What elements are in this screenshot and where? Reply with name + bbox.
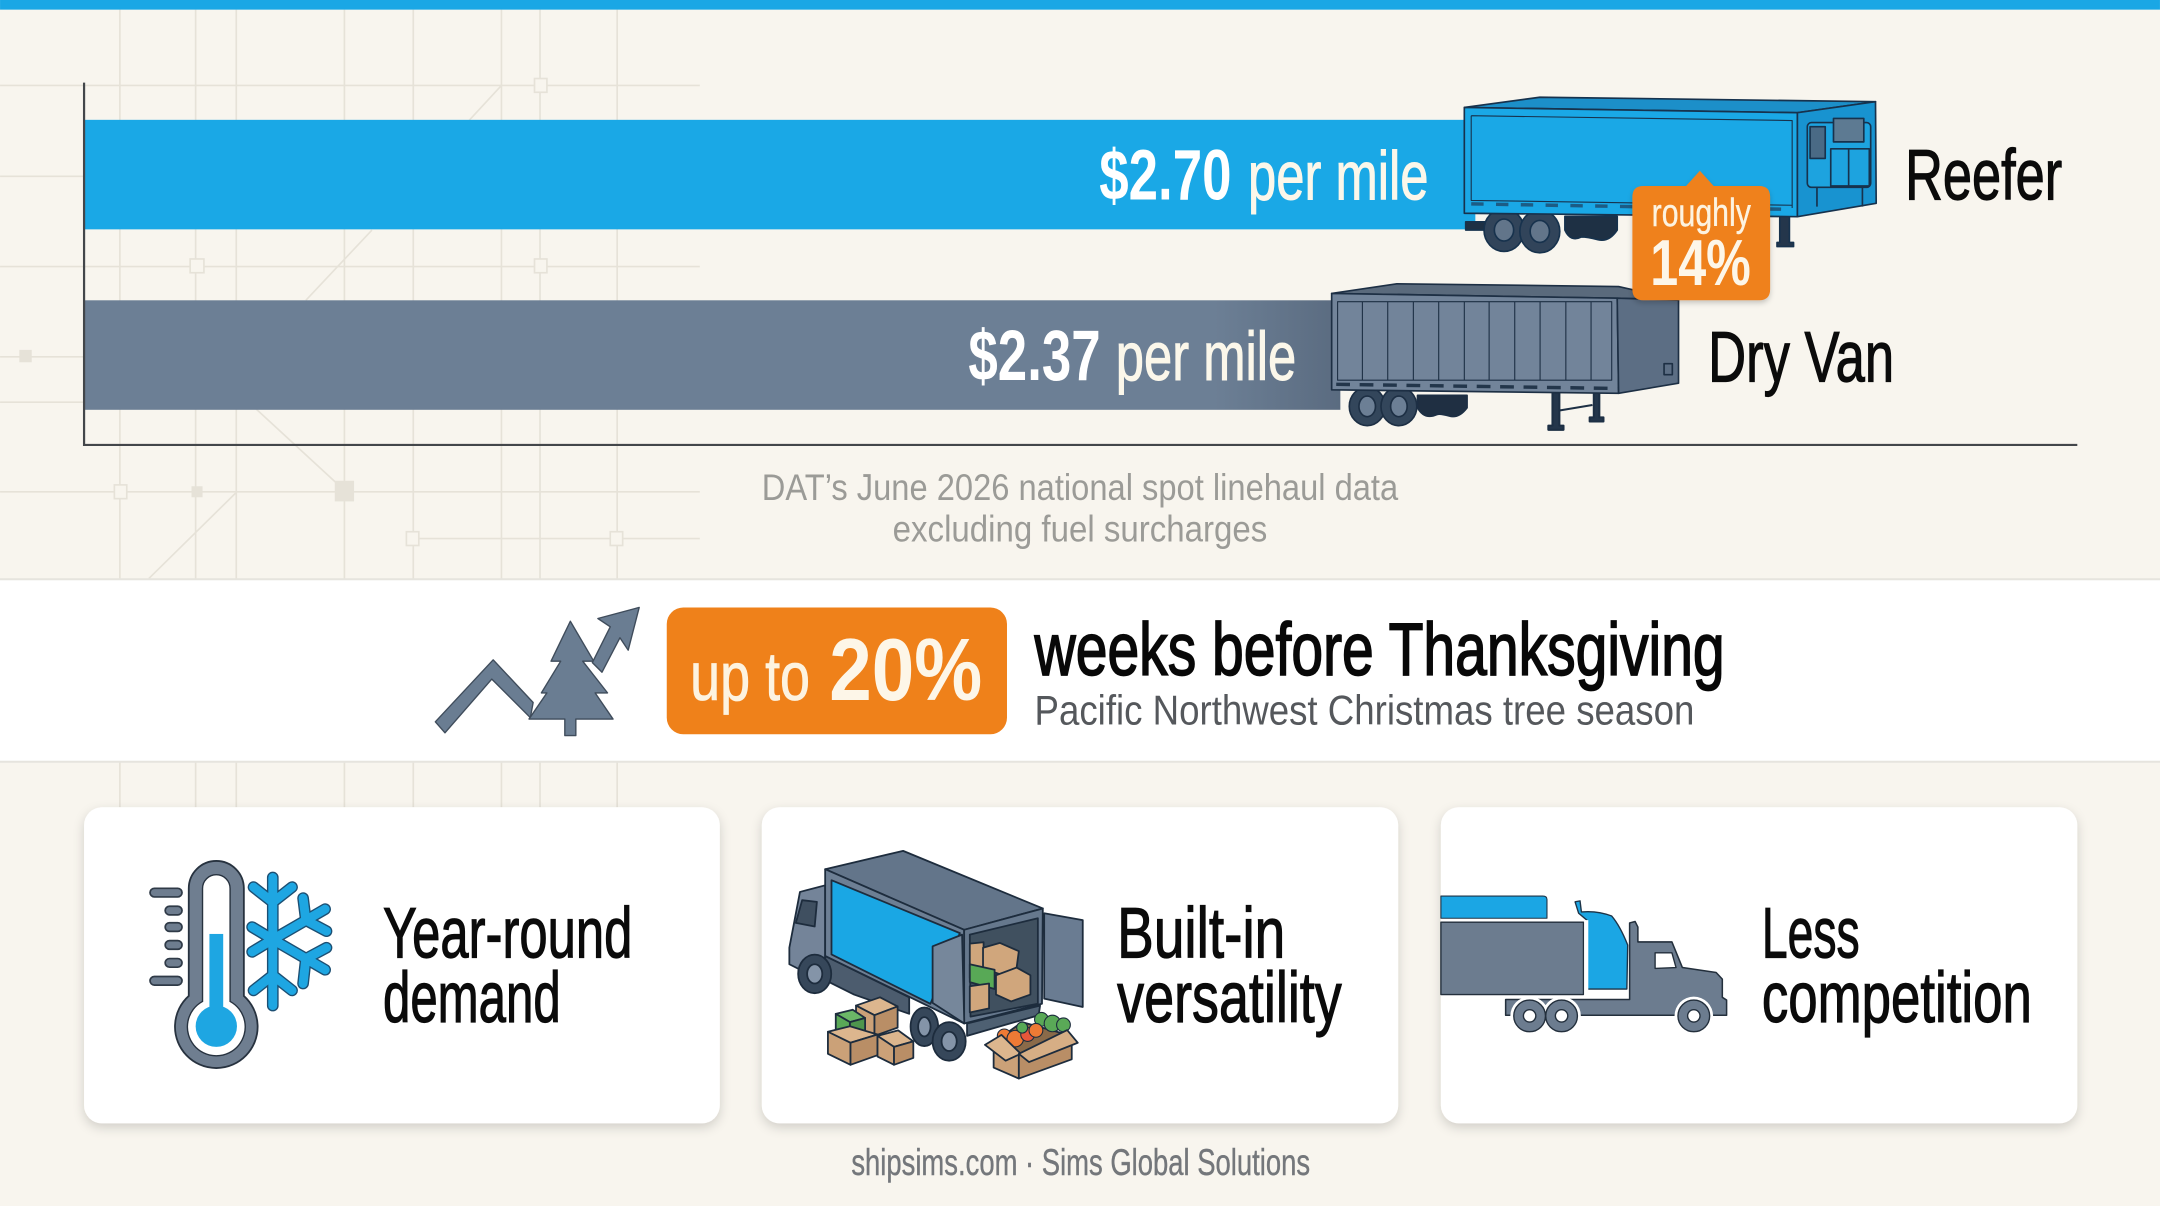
panel: seasonal surge band — [0, 579, 2160, 762]
bar: dry van — [84, 300, 1340, 410]
label: Built-in versatility: Built-in — [1117, 893, 1285, 973]
icon: thermometer and snowflake — [154, 861, 327, 1068]
badge: up to 20%: up to — [690, 638, 810, 715]
icon: truck loaded with boxes and produce — [789, 851, 1083, 1079]
value label: dry van: per mile — [1116, 318, 1296, 395]
bar: reefer — [84, 120, 1475, 229]
label: Year-round demand: demand — [383, 958, 561, 1038]
source caption: excluding fuel surcharges — [893, 507, 1267, 549]
callout: roughly 14% — [1632, 171, 1770, 300]
value label: reefer: $2.70 — [1099, 136, 1232, 216]
label: Less competition: competition — [1762, 958, 2032, 1038]
label: Built-in versatility — [1117, 893, 1342, 1038]
label: Year-round demand — [383, 893, 632, 1038]
label: Built-in versatility: versatility — [1117, 958, 1342, 1038]
icon: dry van trailer — [1332, 284, 1679, 430]
footer credit: shipsims.com · Sims Global Solutions — [851, 1141, 1310, 1183]
panel: built-in versatility — [762, 807, 1398, 1123]
category label: dry van: Dry Van — [1708, 318, 1894, 398]
chart axes — [84, 83, 2077, 445]
value label: dry van: $2.37 — [968, 316, 1101, 396]
top accent bar — [0, 0, 2160, 10]
category label: reefer: Reefer — [1905, 136, 2062, 216]
source caption: DAT’s June 2026 national spot linehaul data — [762, 466, 1398, 508]
badge: up to 20% — [667, 607, 1007, 734]
callout: roughly 14%: roughly — [1652, 192, 1751, 235]
label: Less competition: Less — [1762, 893, 1860, 973]
source caption — [762, 466, 1398, 549]
heading: weeks before Thanksgiving: weeks before Thanksgiving — [1034, 608, 1725, 691]
callout: roughly 14%: 14% — [1650, 226, 1751, 299]
icon: tree with rising arrow — [435, 607, 639, 736]
bar chart: reefer vs dry van spot rates — [84, 83, 2077, 445]
label: Year-round demand: Year-round — [383, 893, 632, 973]
icon: fewer trucks on the road — [1441, 896, 1727, 1035]
value label: reefer: per mile — [1248, 138, 1429, 215]
panel: less competition — [1441, 807, 2077, 1123]
icon: reefer trailer — [1464, 97, 1876, 253]
label: Less competition — [1762, 893, 2032, 1038]
panel: year-round demand — [84, 807, 720, 1123]
badge: up to 20%: 20% — [829, 620, 982, 719]
subheading: Pacific Northwest Christmas tree season: Pacific Northwest Christmas tree season — [1035, 688, 1694, 734]
